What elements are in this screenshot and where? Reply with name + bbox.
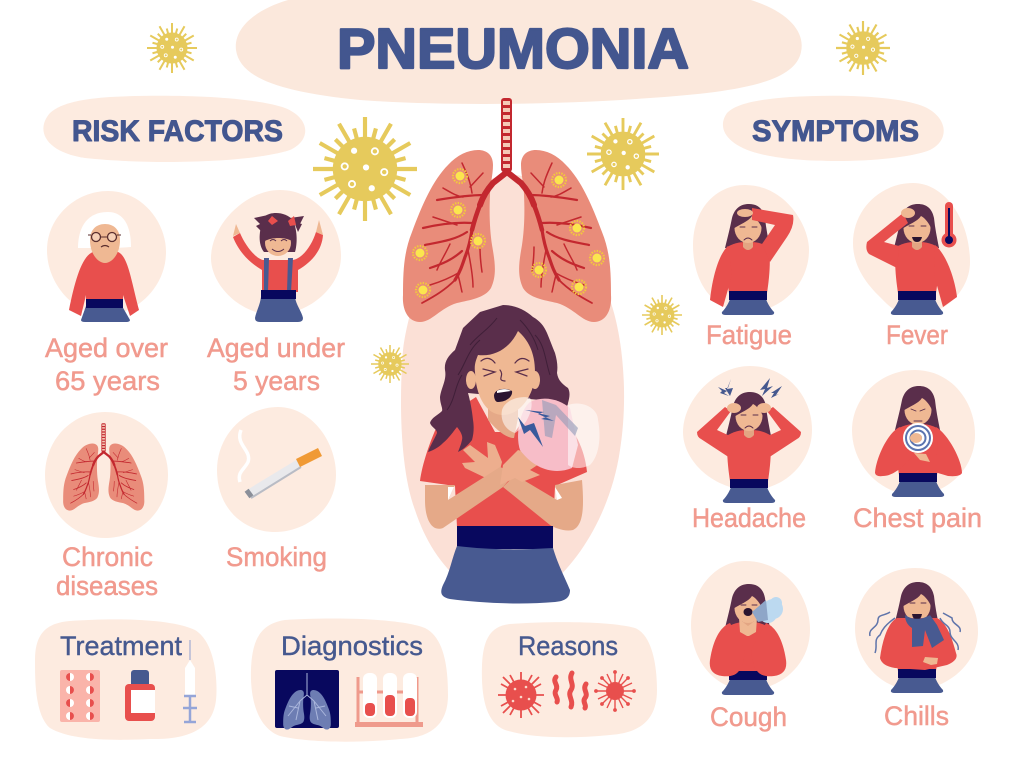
label: Chest pain xyxy=(853,503,982,533)
virus: right of lungs xyxy=(587,118,659,190)
label: Chills xyxy=(884,701,949,731)
icon: medicine bottle xyxy=(125,670,155,721)
icon: virus xyxy=(498,672,544,718)
icon: pill blister xyxy=(60,670,100,722)
panel title: Diagnostics xyxy=(281,631,423,661)
icon: chest x-ray xyxy=(275,670,339,730)
panel title: Treatment xyxy=(60,631,182,661)
panel: reasons xyxy=(482,622,657,737)
heading: risk factors xyxy=(43,96,305,162)
label: 65 years xyxy=(55,366,160,396)
icon: test tubes xyxy=(355,673,423,727)
label: Headache xyxy=(692,503,806,533)
label: Fever xyxy=(886,320,948,350)
label: Aged under xyxy=(207,333,345,363)
symptom: cough xyxy=(691,561,810,732)
virus: left of body xyxy=(371,345,409,383)
symptom: fever xyxy=(853,183,970,350)
panel: treatment xyxy=(35,619,217,740)
label: Cough xyxy=(710,702,787,732)
icon: headache lightning xyxy=(718,378,782,398)
virus: large left of lungs xyxy=(313,117,417,221)
risk: aged over 65 xyxy=(45,191,168,396)
symptom: fatigue xyxy=(693,185,809,350)
central woman coughing xyxy=(420,305,599,603)
risk: aged under 5 xyxy=(207,190,345,396)
central figure background xyxy=(401,175,624,585)
central lungs with infection xyxy=(403,98,611,322)
panel: diagnostics xyxy=(251,619,448,742)
heading: symptoms: SYMPTOMS xyxy=(752,115,919,148)
icon: bacteria xyxy=(555,673,586,708)
symptom: headache xyxy=(683,366,812,533)
icon: thermometer xyxy=(942,202,956,248)
symptom: chills xyxy=(855,568,978,731)
title text: PNEUMONIA xyxy=(337,17,689,81)
label: Chronic xyxy=(62,542,153,572)
icon: cough cloud xyxy=(752,597,783,623)
heading: risk factors: RISK FACTORS xyxy=(72,115,283,148)
icon: shiver lines xyxy=(870,612,960,653)
label: diseases xyxy=(56,571,158,601)
heading: symptoms xyxy=(723,96,944,161)
virus: top left xyxy=(147,23,197,73)
symptom: chest pain xyxy=(852,370,982,533)
panel title: Reasons xyxy=(518,631,618,661)
risk: chronic diseases xyxy=(45,412,168,601)
label: Smoking xyxy=(226,542,327,572)
label: Fatigue xyxy=(706,320,792,350)
risk: smoking xyxy=(217,407,336,572)
label: Aged over xyxy=(45,333,168,363)
label: 5 years xyxy=(233,366,320,396)
title banner xyxy=(236,0,802,104)
icon: syringe xyxy=(183,640,197,722)
virus: top right xyxy=(836,21,890,75)
virus: right of body xyxy=(642,295,682,335)
icon: spiked cell xyxy=(594,670,636,712)
